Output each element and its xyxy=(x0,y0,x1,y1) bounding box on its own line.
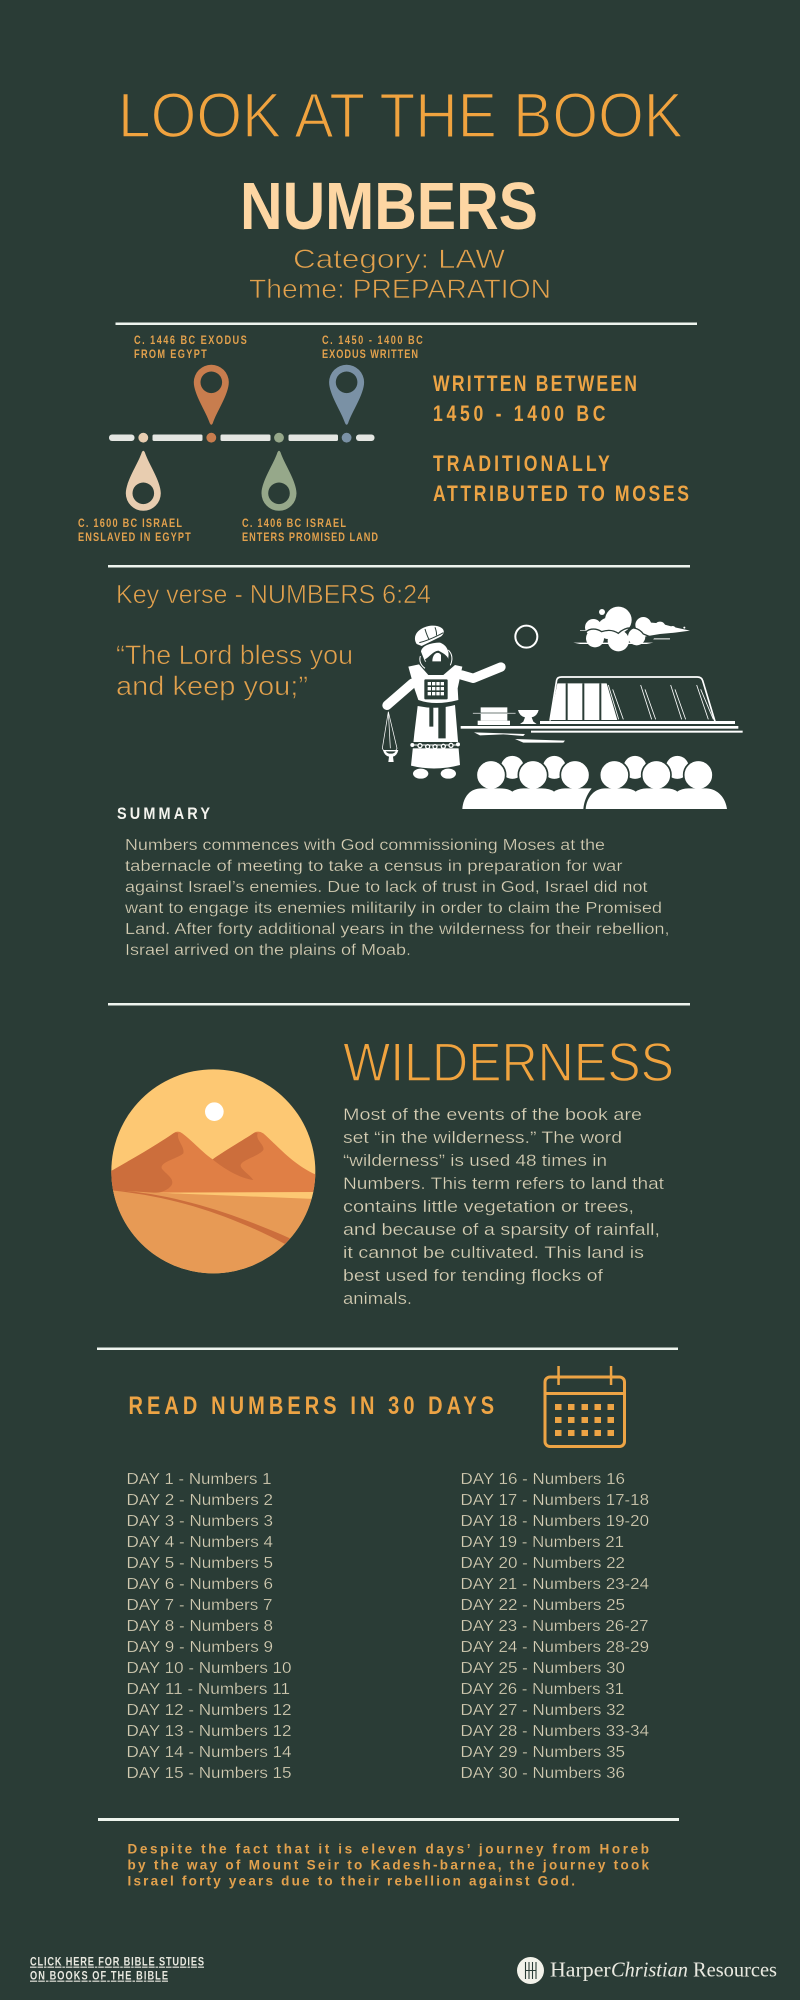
list: days 16 to 30: DAY 22 - Numbers 25 xyxy=(460,1597,625,1614)
summary text: tabernacle of meeting to take a census in preparation for war xyxy=(125,858,622,875)
wilderness text: it cannot be cultivated. This land is xyxy=(343,1244,644,1262)
list: days 1 to 15 xyxy=(126,1471,292,1782)
text block: date and author: WRITTEN BETWEEN xyxy=(433,372,637,397)
panel: timeline xyxy=(78,335,423,544)
list: days 1 to 15: DAY 6 - Numbers 6 xyxy=(126,1576,273,1593)
label: exodus written xyxy=(322,335,423,361)
book name: NUMBERS xyxy=(240,169,538,244)
logo wordmark: Resources xyxy=(693,1958,777,1982)
label: exodus written: EXODUS WRITTEN xyxy=(322,349,418,361)
icon: orange pin xyxy=(194,365,229,425)
text block: date and author: ATTRIBUTED TO MOSES xyxy=(433,482,689,507)
illustration: desert scene xyxy=(107,1067,320,1280)
timeline bar xyxy=(109,433,374,443)
label: Israel enslaved: C. 1600 BC ISRAEL xyxy=(78,518,183,530)
list: days 1 to 15: DAY 7 - Numbers 7 xyxy=(126,1597,273,1614)
panel: reading plan xyxy=(126,1366,649,1782)
label: exodus from Egypt: C. 1446 BC EXODUS xyxy=(134,335,247,347)
list: days 16 to 30: DAY 30 - Numbers 36 xyxy=(460,1765,625,1782)
quote: “The Lord bless you xyxy=(116,640,353,670)
label: exodus from Egypt: FROM EGYPT xyxy=(134,349,207,361)
list: days 16 to 30: DAY 25 - Numbers 30 xyxy=(460,1660,625,1677)
list: days 16 to 30: DAY 18 - Numbers 19-20 xyxy=(460,1513,649,1530)
wilderness text xyxy=(343,1106,664,1308)
list: days 1 to 15: DAY 12 - Numbers 12 xyxy=(126,1702,292,1719)
icon: ring of light xyxy=(515,626,537,648)
text block: date and author: 1450 - 1400 BC xyxy=(433,402,605,427)
list: days 16 to 30: DAY 26 - Numbers 31 xyxy=(460,1681,624,1698)
label: enters promised land: ENTERS PROMISED LAND xyxy=(242,532,378,544)
closing note: Despite the fact that it is eleven days’ journey from Horeb xyxy=(128,1842,649,1856)
priest xyxy=(382,626,501,779)
list: days 1 to 15: DAY 3 - Numbers 3 xyxy=(126,1513,273,1530)
heading: READ NUMBERS IN 30 DAYS xyxy=(128,1392,494,1420)
list: days 1 to 15: DAY 2 - Numbers 2 xyxy=(126,1492,273,1509)
footer link xyxy=(30,1957,204,1983)
wilderness text: set “in the wilderness.” The word xyxy=(343,1129,622,1147)
list: days 16 to 30: DAY 19 - Numbers 21 xyxy=(460,1534,624,1551)
publisher logo xyxy=(517,1957,777,1984)
summary text: Numbers commences with God commissioning Moses at the xyxy=(125,837,605,854)
list: days 16 to 30: DAY 23 - Numbers 26-27 xyxy=(460,1618,649,1635)
list: days 1 to 15: DAY 8 - Numbers 8 xyxy=(126,1618,273,1635)
closing note xyxy=(128,1842,649,1888)
panel: wilderness xyxy=(343,1031,674,1308)
label: Israel enslaved: ENSLAVED IN EGYPT xyxy=(78,532,191,544)
category: Category: LAW xyxy=(293,244,506,274)
panel: summary xyxy=(117,805,670,959)
list: days 1 to 15: DAY 4 - Numbers 4 xyxy=(126,1534,273,1551)
logo wordmark: Christian xyxy=(611,1958,688,1982)
text block: date and author: TRADITIONALLY xyxy=(433,452,610,477)
label: exodus from Egypt xyxy=(134,335,247,361)
wilderness text: “wilderness” is used 48 times in xyxy=(343,1152,607,1170)
footer link: CLICK HERE FOR BIBLE STUDIES xyxy=(30,1957,204,1969)
heading: Key verse - NUMBERS 6:24 xyxy=(116,579,431,609)
people xyxy=(476,755,713,790)
label: enters promised land xyxy=(242,518,378,544)
illustration: priest, tabernacle and people xyxy=(382,607,743,809)
panel: key verse xyxy=(116,579,431,701)
summary text: want to engage its enemies militarily in order to claim the Promised xyxy=(124,900,662,917)
list: days 1 to 15: DAY 9 - Numbers 9 xyxy=(126,1639,273,1656)
icon: logo mark xyxy=(517,1957,544,1984)
theme: Theme: PREPARATION xyxy=(249,274,551,304)
list: days 1 to 15: DAY 15 - Numbers 15 xyxy=(126,1765,292,1782)
closing note: Israel forty years due to their rebellion against God. xyxy=(128,1874,575,1888)
quote: and keep you;” xyxy=(116,671,308,701)
list: days 16 to 30: DAY 24 - Numbers 28-29 xyxy=(460,1639,649,1656)
icon: green pin xyxy=(262,451,296,511)
list: days 16 to 30: DAY 28 - Numbers 33-34 xyxy=(460,1723,649,1740)
icon: peach pin xyxy=(126,451,161,511)
panel: header xyxy=(118,81,683,304)
label: Israel enslaved xyxy=(78,518,191,544)
list: days 1 to 15: DAY 13 - Numbers 12 xyxy=(126,1723,292,1740)
icon: calendar xyxy=(545,1366,624,1446)
icon: cloud xyxy=(573,607,690,651)
closing note: by the way of Mount Seir to Kadesh-barnea, the journey took xyxy=(128,1858,649,1872)
wilderness text: Numbers. This term refers to land that xyxy=(343,1175,664,1193)
icon: blue pin xyxy=(329,365,364,425)
wilderness text: best used for tending flocks of xyxy=(343,1267,603,1285)
label: exodus written: C. 1450 - 1400 BC xyxy=(322,335,423,347)
list: days 16 to 30: DAY 20 - Numbers 22 xyxy=(460,1555,625,1572)
summary text: Israel arrived on the plains of Moab. xyxy=(125,942,411,959)
heading: SUMMARY xyxy=(117,805,210,823)
list: days 1 to 15: DAY 10 - Numbers 10 xyxy=(126,1660,292,1677)
summary text: Land. After forty additional years in the wilderness for their rebellion, xyxy=(125,921,670,938)
list: days 16 to 30: DAY 21 - Numbers 23-24 xyxy=(460,1576,649,1593)
wilderness text: contains little vegetation or trees, xyxy=(343,1198,634,1216)
list: days 16 to 30: DAY 17 - Numbers 17-18 xyxy=(460,1492,649,1509)
list: days 16 to 30: DAY 29 - Numbers 35 xyxy=(460,1744,625,1761)
text block: date and author xyxy=(433,372,689,507)
wilderness text: animals. xyxy=(343,1290,412,1308)
wilderness text: and because of a sparsity of rainfall, xyxy=(343,1221,660,1239)
list: days 1 to 15: DAY 14 - Numbers 14 xyxy=(126,1744,292,1761)
logo wordmark xyxy=(550,1958,777,1982)
footer link: ON BOOKS OF THE BIBLE xyxy=(30,1971,168,1983)
wilderness text: Most of the events of the book are xyxy=(343,1106,642,1124)
list: days 16 to 30: DAY 27 - Numbers 32 xyxy=(460,1702,625,1719)
summary text xyxy=(124,837,669,959)
label: enters promised land: C. 1406 BC ISRAEL xyxy=(242,518,347,530)
logo wordmark: Harper xyxy=(550,1958,611,1982)
list: days 1 to 15: DAY 5 - Numbers 5 xyxy=(126,1555,273,1572)
heading: WILDERNESS xyxy=(343,1031,674,1093)
tabernacle xyxy=(461,677,743,743)
quote xyxy=(116,640,353,701)
list: days 16 to 30: DAY 16 - Numbers 16 xyxy=(460,1471,625,1488)
title: LOOK AT THE BOOK xyxy=(118,81,683,151)
list: days 1 to 15: DAY 1 - Numbers 1 xyxy=(126,1471,272,1488)
list: days 16 to 30 xyxy=(460,1471,649,1782)
list: days 1 to 15: DAY 11 - Numbers 11 xyxy=(126,1681,290,1698)
summary text: against Israel’s enemies. Due to lack of trust in God, Israel did not xyxy=(125,879,648,896)
